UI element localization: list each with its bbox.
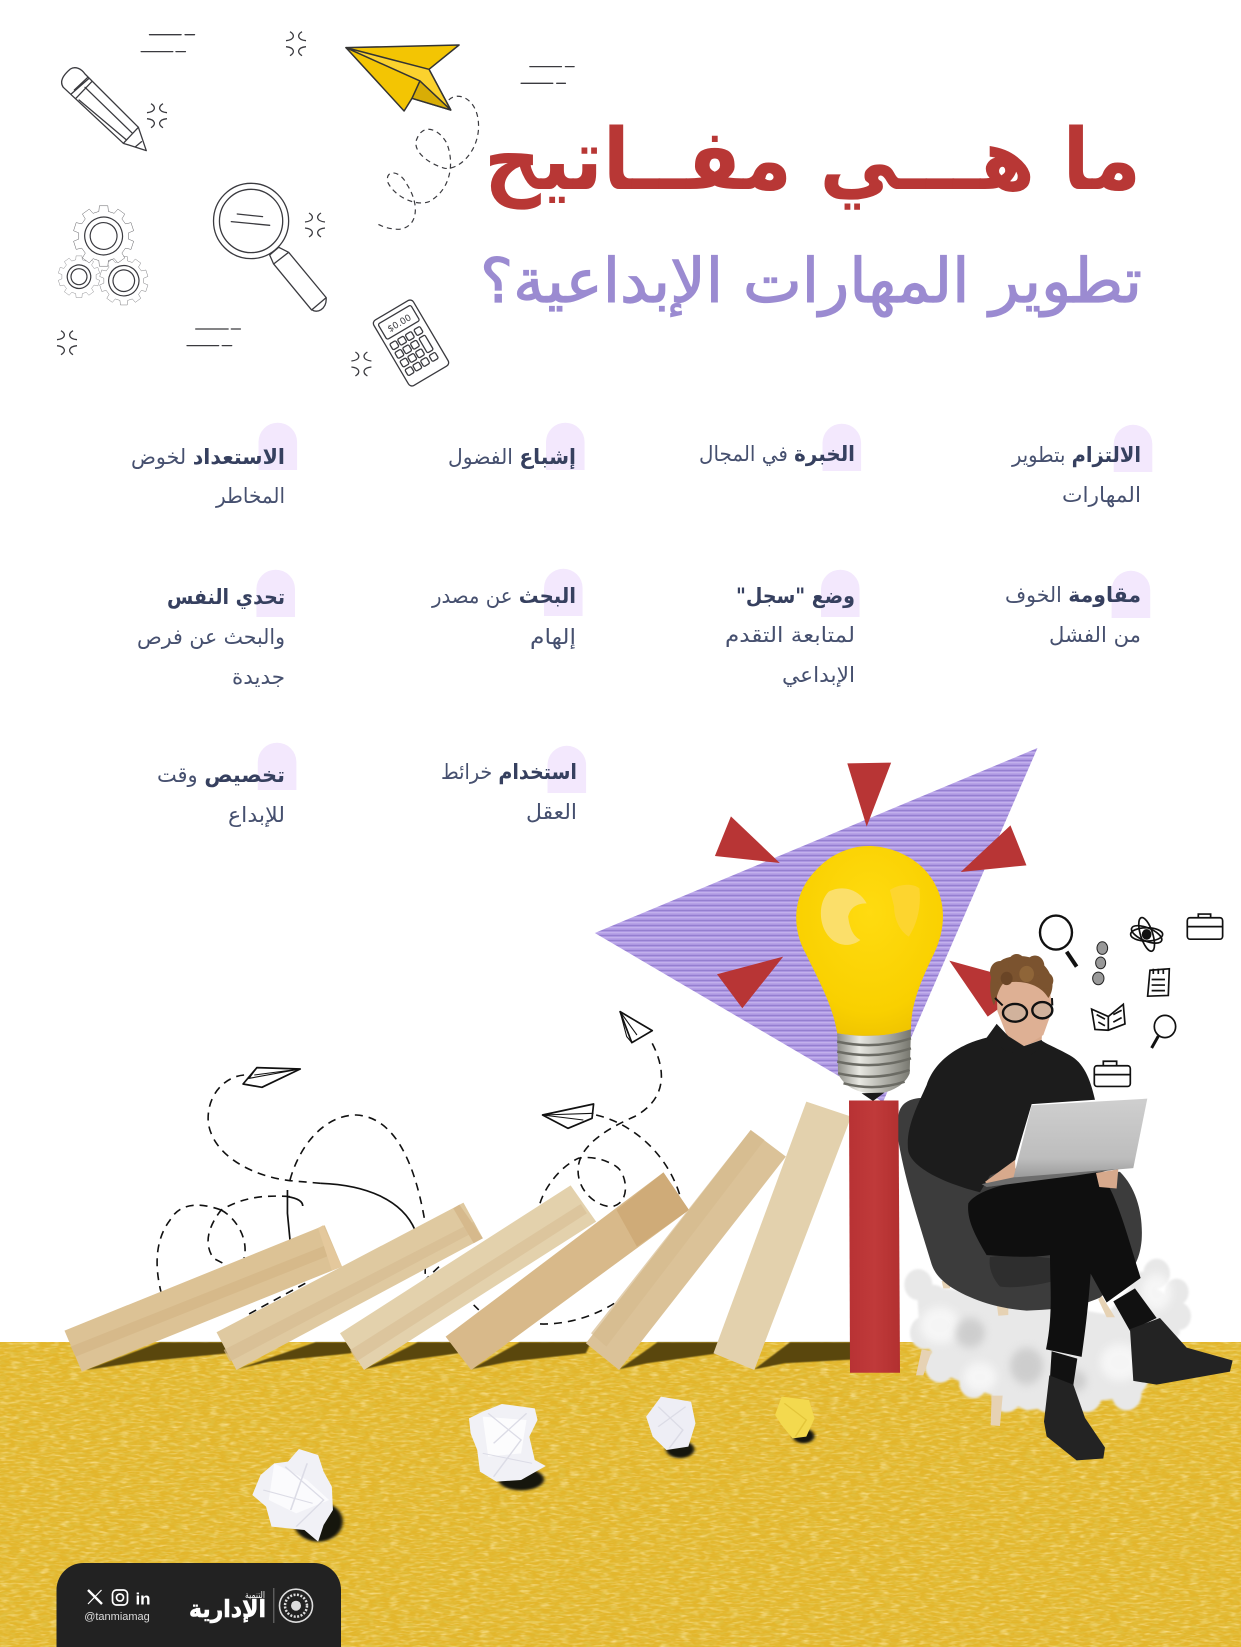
logo emblem [280, 1589, 312, 1622]
purple textured triangle [595, 748, 1038, 1102]
item badge: row 2 col 1 [1112, 571, 1150, 618]
item: self challenge: جديدة [232, 665, 285, 689]
icon: open book [1092, 1004, 1125, 1030]
item: mind maps: العقل [526, 800, 577, 824]
item: commitment [1011, 443, 1141, 507]
item: resist fear: مقاومة الخوف [1005, 583, 1141, 607]
plank shadows on floor [86, 1342, 877, 1370]
right boot [1130, 1318, 1233, 1385]
logo divider [273, 1588, 274, 1623]
plank 3 [340, 1185, 596, 1370]
item: progress log: لمتابعة التقدم [725, 623, 855, 647]
item badge: row 1 col 1 [1114, 425, 1152, 472]
icon: big magnifier [1040, 916, 1077, 967]
left boot [1044, 1375, 1105, 1460]
icon: atom [1130, 915, 1164, 953]
icon: magnifier [214, 183, 326, 311]
plank 4 [446, 1172, 689, 1370]
item: progress log: الإبداعي [782, 663, 855, 687]
item: dedicate time [157, 763, 285, 827]
hair [990, 954, 1053, 1005]
paper ball 2 [469, 1404, 546, 1490]
item badge: row 2 col 3 [544, 569, 583, 616]
item: resist fear [1005, 583, 1141, 647]
laptop base [982, 1169, 1119, 1187]
icon: speed dashes top [141, 35, 195, 52]
turtleneck [990, 1024, 1043, 1055]
socks [1050, 1288, 1157, 1385]
item badge: row 1 col 3 [546, 423, 585, 470]
paper ball 1 [252, 1449, 343, 1542]
logo main word: الإدارية [189, 1595, 266, 1623]
subtitle: تطوير المهارات الإبداعية؟ [480, 246, 1142, 318]
doodle icons over the head [1040, 914, 1223, 1086]
item badge: row 2 col 2 [821, 570, 860, 617]
icon: X [88, 1590, 102, 1604]
item: resist fear: من الفشل [1049, 623, 1141, 647]
icon: sparkle 1 [286, 32, 306, 56]
sweater [908, 1024, 1095, 1192]
yellow light bulb [796, 846, 943, 1101]
face [997, 976, 1053, 1046]
icon: dna [1093, 942, 1108, 985]
doodle paper planes [243, 1012, 652, 1128]
icon: speed dashes lower [187, 329, 240, 346]
hands [985, 1160, 1118, 1189]
cloud [904, 1259, 1191, 1412]
plank 6 [713, 1102, 851, 1370]
icon: sparkle 2 [147, 104, 167, 128]
item badge: row 3 col 4 [258, 743, 296, 790]
plank 2 [217, 1203, 483, 1370]
crumpled paper balls [252, 1397, 815, 1542]
laptop [1013, 1099, 1147, 1178]
icon: yellow paper plane [346, 45, 459, 111]
red column [849, 1100, 900, 1373]
title: ما هـــي مفــاتيح [484, 111, 1141, 210]
chair legs [916, 1281, 1115, 1426]
paper ball 4 [775, 1397, 815, 1443]
footer black brand panel [56, 1563, 341, 1647]
yellow textile floor [0, 1342, 1241, 1647]
plank 1 [64, 1225, 342, 1372]
neck [1000, 1011, 1043, 1046]
icon: gears [53, 198, 154, 311]
paper ball 3 [646, 1397, 695, 1458]
item: mind maps: استخدام خرائط [441, 760, 577, 784]
item: inspiration: إلهام [530, 625, 576, 650]
doodle icons top-left [53, 32, 574, 387]
item: self challenge: تحدي النفس [167, 585, 285, 610]
icon: briefcase top [1187, 914, 1223, 939]
crossed trousers [968, 1172, 1141, 1357]
item: risk readiness [131, 445, 285, 508]
icon: calculator: $0.00 [386, 313, 414, 335]
logo small word: التنمية [245, 1591, 265, 1601]
item: mind maps [441, 760, 577, 824]
item: dedicate time: تخصيص وقت [157, 763, 285, 787]
icon: sparkle 3 [305, 213, 325, 237]
icon: speed dashes right [521, 67, 574, 83]
chair [898, 1098, 1142, 1311]
item: self challenge: والبحث عن فرص [137, 625, 285, 649]
item: commitment: المهارات [1062, 483, 1141, 507]
glasses [995, 998, 1052, 1022]
item: progress log [725, 584, 855, 687]
item: curiosity: إشباع الفضول [448, 445, 576, 469]
item: self challenge [137, 585, 285, 689]
red rays around bulb [715, 763, 1026, 1017]
icon: dashed plane trail [378, 96, 479, 229]
item: inspiration: البحث عن مصدر [431, 584, 576, 608]
list of creative skill keys [131, 423, 1152, 827]
icon: instagram [112, 1590, 128, 1605]
icon: calculator [372, 299, 450, 387]
plank 5 [586, 1130, 786, 1370]
icon: pencil [62, 68, 146, 151]
icon: notepad [1148, 969, 1169, 996]
icon: linkedin: in [135, 1590, 151, 1608]
icon: sparkle 5 [351, 352, 371, 376]
item: progress log: وضع "سجل" [736, 584, 855, 608]
person on chair with laptop [898, 914, 1233, 1460]
dashed doodle trails [157, 1043, 680, 1324]
item: inspiration [431, 584, 576, 650]
item badge: row 2 col 4 [256, 570, 295, 617]
social handle: @tanmiamag [84, 1611, 150, 1623]
icon: sparkle 4 [57, 331, 77, 355]
item: experience: الخبرة في المجال [699, 442, 855, 466]
icon: small magnifier [1152, 1015, 1176, 1048]
item: dedicate time: للإبداع [228, 803, 285, 827]
chair seat [990, 1255, 1053, 1287]
item: risk readiness: المخاطر [215, 484, 285, 508]
item: risk readiness: الاستعداد لخوض [131, 445, 285, 469]
item badge: row 1 col 2 [822, 424, 861, 471]
falling wooden domino planks [64, 1102, 851, 1372]
icon: briefcase lower [1094, 1061, 1130, 1086]
item badge: row 1 col 4 [258, 423, 297, 470]
item: commitment: الالتزام بتطوير [1011, 443, 1141, 467]
item badge: row 3 col 3 [548, 746, 586, 793]
